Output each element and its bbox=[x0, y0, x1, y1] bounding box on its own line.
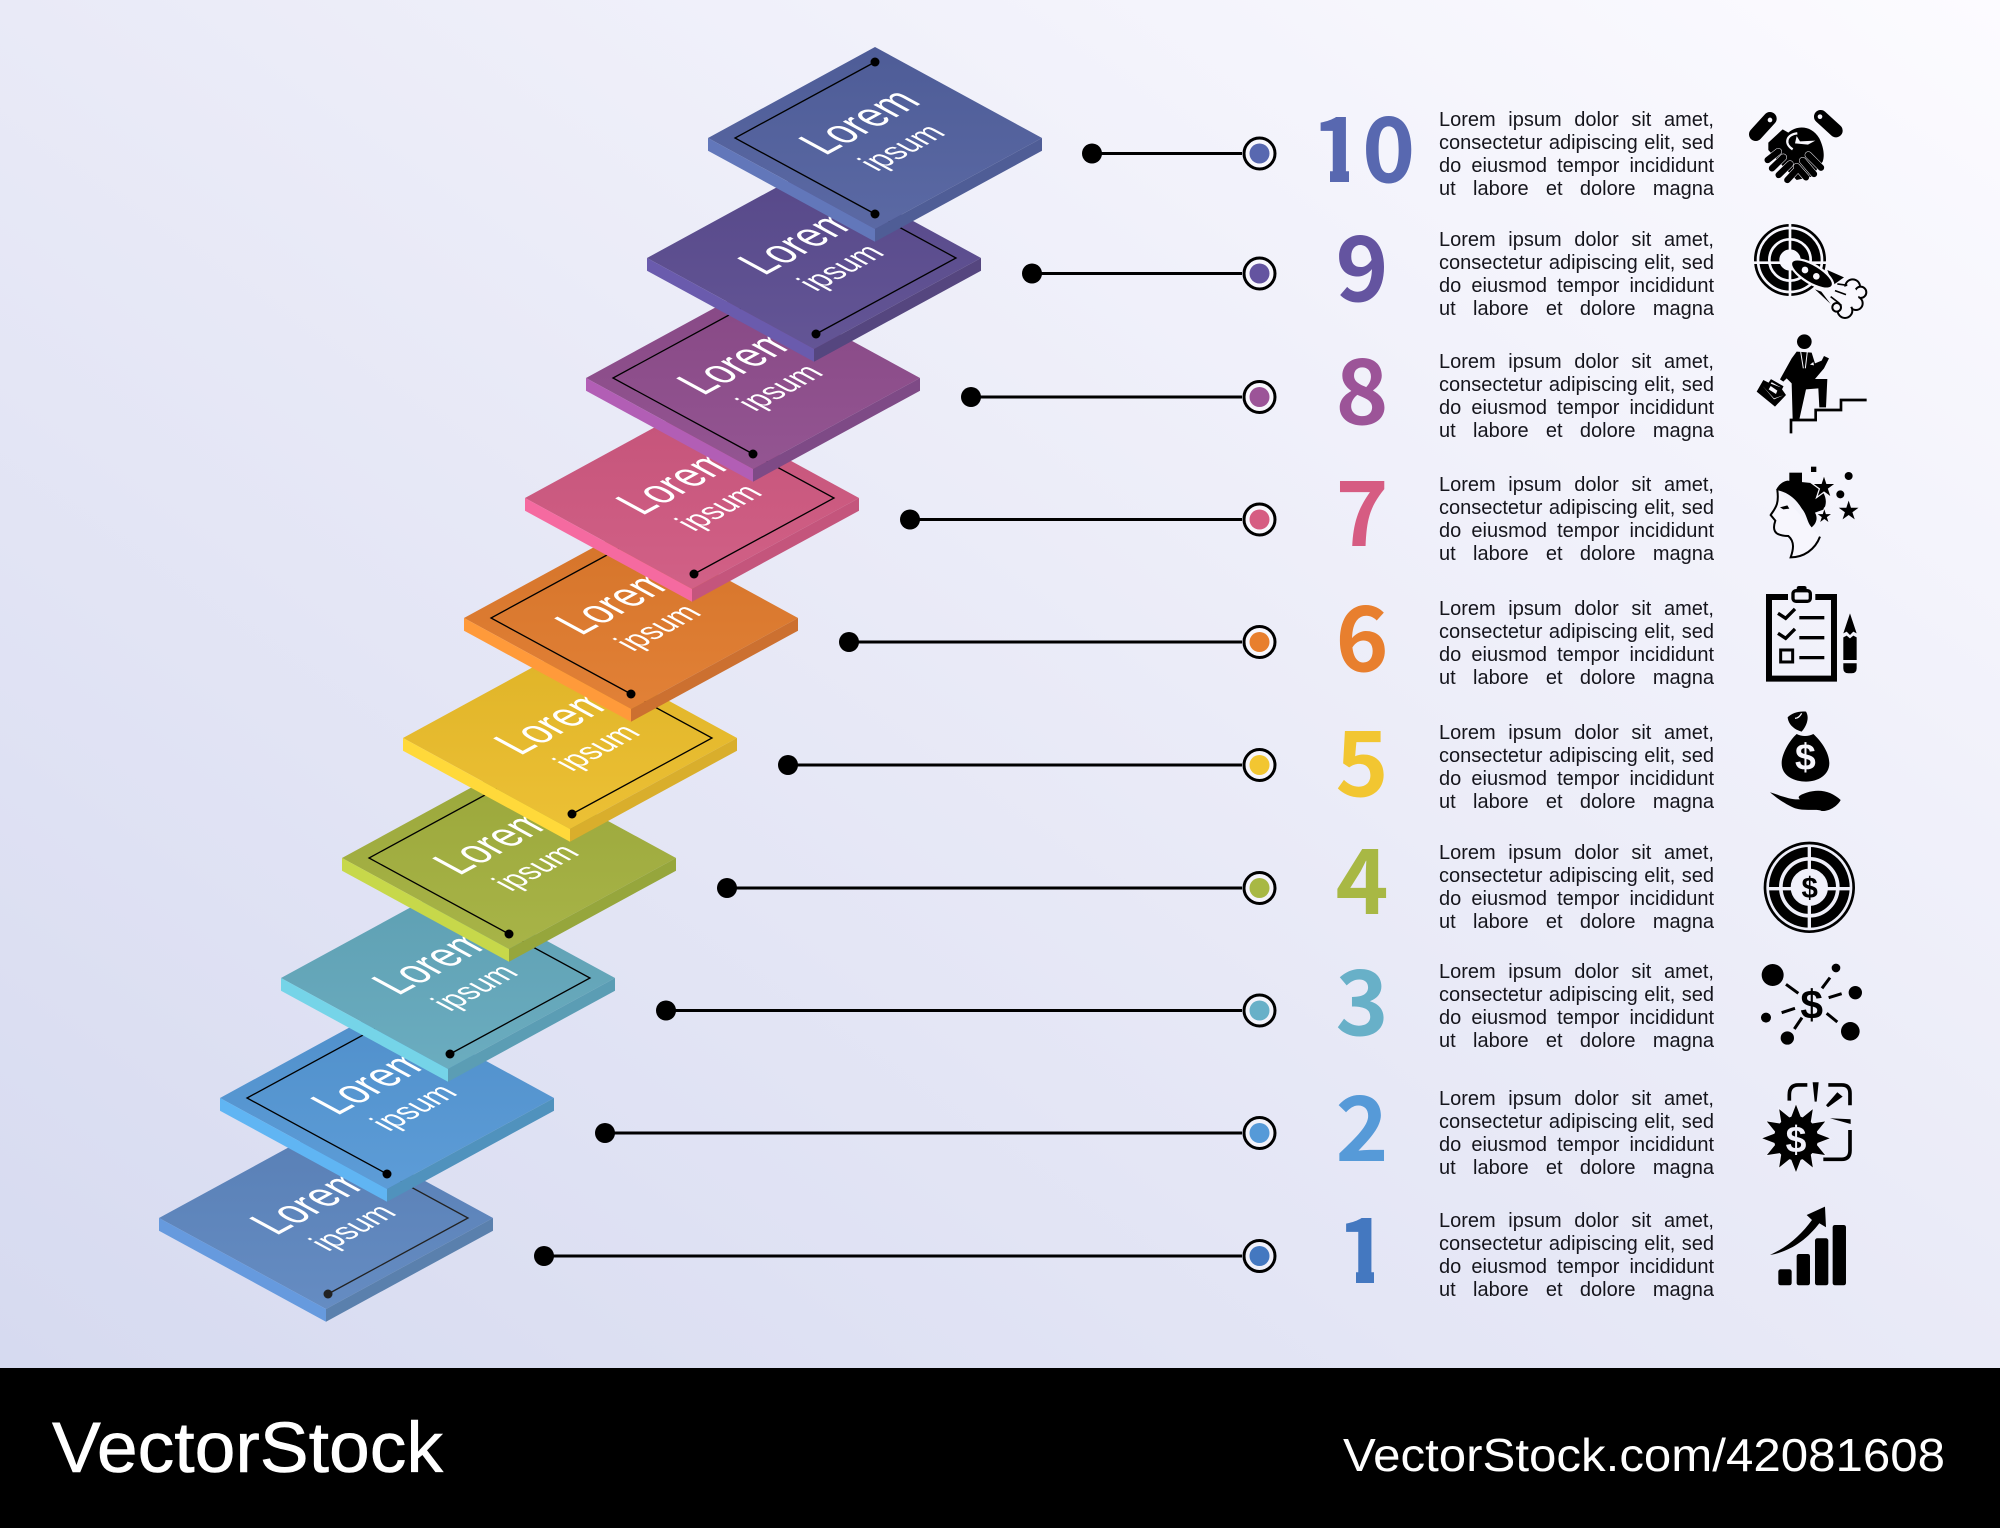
step 10 bbox=[708, 47, 1042, 242]
text block 3 bbox=[1439, 961, 1714, 1052]
step 3: Lorem bbox=[360, 922, 505, 1001]
text block 2: ut labore et dolore magna bbox=[1439, 1157, 1714, 1179]
number 8: 8 bbox=[1335, 320, 1389, 450]
text block 1: do eiusmod tempor incididunt bbox=[1439, 1256, 1714, 1278]
icon: head with stars bbox=[1771, 467, 1858, 557]
step 8: ipsum bbox=[728, 359, 832, 416]
step 8 bbox=[586, 287, 920, 482]
text block 6: do eiusmod tempor incididunt bbox=[1439, 644, 1714, 666]
step 8: Lorem bbox=[665, 322, 810, 401]
text block 6: consectetur adipiscing elit, sed bbox=[1439, 621, 1714, 643]
icon: checklist clipboard and pencil bbox=[1769, 586, 1857, 679]
step 6: ipsum bbox=[606, 599, 710, 656]
text block 10: do eiusmod tempor incididunt bbox=[1439, 155, 1714, 177]
step 2: Lorem bbox=[299, 1042, 444, 1121]
icon: businessman climbing stairs bbox=[1757, 334, 1867, 433]
number 4: 4 bbox=[1335, 810, 1389, 940]
connector 9 bbox=[1022, 258, 1275, 289]
text block 5: ut labore et dolore magna bbox=[1439, 791, 1714, 813]
connector 2 bbox=[595, 1118, 1275, 1148]
text block 7: ut labore et dolore magna bbox=[1439, 543, 1714, 565]
icon: dollar burst with frame: $ bbox=[1786, 1118, 1807, 1160]
icon: growth bar chart with arrow bbox=[1770, 1207, 1846, 1285]
step 4 bbox=[342, 767, 676, 962]
text block 4: do eiusmod tempor incididunt bbox=[1439, 888, 1714, 910]
step 1: Lorem bbox=[238, 1162, 383, 1241]
connector 1 bbox=[534, 1240, 1275, 1272]
icon: handshake bbox=[1756, 114, 1836, 180]
text block 2: Lorem ipsum dolor sit amet, bbox=[1439, 1088, 1714, 1110]
connector 3 bbox=[656, 995, 1275, 1026]
text block 10 bbox=[1439, 109, 1714, 200]
number 6: 6 bbox=[1335, 567, 1389, 697]
step 7: Lorem bbox=[604, 442, 749, 521]
text block 6: ut labore et dolore magna bbox=[1439, 667, 1714, 689]
text block 8: consectetur adipiscing elit, sed bbox=[1439, 374, 1714, 396]
text block 5: do eiusmod tempor incididunt bbox=[1439, 768, 1714, 790]
text block 9 bbox=[1439, 229, 1714, 320]
number 1: 1 bbox=[1336, 1179, 1390, 1309]
step 10: Lorem bbox=[787, 82, 932, 161]
text block 8: do eiusmod tempor incididunt bbox=[1439, 397, 1714, 419]
text block 3: do eiusmod tempor incididunt bbox=[1439, 1007, 1714, 1029]
connector 5 bbox=[778, 750, 1275, 780]
text block 8: Lorem ipsum dolor sit amet, bbox=[1439, 351, 1714, 373]
number 3: 3 bbox=[1335, 931, 1389, 1061]
text block 2 bbox=[1439, 1088, 1714, 1179]
icon: money bag over hand: $ bbox=[1795, 735, 1816, 777]
step 5: Lorem bbox=[482, 682, 627, 761]
image url: VectorStock.com/42081608 bbox=[1343, 1429, 1945, 1481]
text block 4: Lorem ipsum dolor sit amet, bbox=[1439, 842, 1714, 864]
text block 2: do eiusmod tempor incididunt bbox=[1439, 1134, 1714, 1156]
text block 3: Lorem ipsum dolor sit amet, bbox=[1439, 961, 1714, 983]
connector 6 bbox=[839, 626, 1275, 658]
number 5: 5 bbox=[1335, 692, 1389, 822]
text block 1 bbox=[1439, 1210, 1714, 1301]
icon: dollar burst with frame bbox=[1761, 1082, 1851, 1173]
text block 4: consectetur adipiscing elit, sed bbox=[1439, 865, 1714, 887]
step 9: Lorem bbox=[726, 202, 871, 281]
icon: dollar target bbox=[1765, 843, 1854, 932]
text block 5 bbox=[1439, 722, 1714, 813]
text block 8 bbox=[1439, 351, 1714, 442]
step 2: ipsum bbox=[362, 1079, 466, 1136]
text block 7: Lorem ipsum dolor sit amet, bbox=[1439, 474, 1714, 496]
connector 10 bbox=[1082, 138, 1275, 169]
step 1 bbox=[159, 1127, 493, 1322]
text block 9: Lorem ipsum dolor sit amet, bbox=[1439, 229, 1714, 251]
text block 9: consectetur adipiscing elit, sed bbox=[1439, 252, 1714, 274]
icon: dollar network: $ bbox=[1800, 982, 1823, 1028]
text block 9: ut labore et dolore magna bbox=[1439, 298, 1714, 320]
brand name: VectorStock bbox=[52, 1409, 444, 1488]
text block 6 bbox=[1439, 598, 1714, 689]
icon: money bag over hand bbox=[1770, 712, 1841, 811]
text block 8: ut labore et dolore magna bbox=[1439, 420, 1714, 442]
step 5 bbox=[403, 647, 737, 842]
connector 8 bbox=[961, 382, 1275, 412]
text block 7: consectetur adipiscing elit, sed bbox=[1439, 497, 1714, 519]
step 7: ipsum bbox=[667, 479, 771, 536]
step 1: ipsum bbox=[301, 1199, 405, 1256]
text block 5: Lorem ipsum dolor sit amet, bbox=[1439, 722, 1714, 744]
step 9: ipsum bbox=[789, 239, 893, 296]
text block 6: Lorem ipsum dolor sit amet, bbox=[1439, 598, 1714, 620]
step 3 bbox=[281, 887, 615, 1082]
staircase of ten isometric steps bbox=[159, 47, 1042, 1322]
number 9: 9 bbox=[1335, 197, 1389, 327]
number 2: 2 bbox=[1335, 1057, 1389, 1187]
text block 3: consectetur adipiscing elit, sed bbox=[1439, 984, 1714, 1006]
step 2 bbox=[220, 1007, 554, 1202]
step 6: Lorem bbox=[543, 562, 688, 641]
step 4: ipsum bbox=[484, 839, 588, 896]
connector 7 bbox=[900, 504, 1275, 535]
text block 7 bbox=[1439, 474, 1714, 565]
step 4: Lorem bbox=[421, 802, 566, 881]
step 3: ipsum bbox=[423, 959, 527, 1016]
text block 3: ut labore et dolore magna bbox=[1439, 1030, 1714, 1052]
connector 4 bbox=[717, 872, 1275, 904]
icon: dollar target: $ bbox=[1801, 872, 1818, 905]
number 7: 7 bbox=[1335, 442, 1389, 572]
step 6 bbox=[464, 527, 798, 722]
text block 10: Lorem ipsum dolor sit amet, bbox=[1439, 109, 1714, 131]
number 10: 10 bbox=[1311, 78, 1413, 208]
text block 2: consectetur adipiscing elit, sed bbox=[1439, 1111, 1714, 1133]
text block 10: ut labore et dolore magna bbox=[1439, 178, 1714, 200]
step 7 bbox=[525, 407, 859, 602]
text block 10: consectetur adipiscing elit, sed bbox=[1439, 132, 1714, 154]
step 10: ipsum bbox=[850, 119, 954, 176]
icon: target with rocket bbox=[1753, 223, 1866, 318]
text block 5: consectetur adipiscing elit, sed bbox=[1439, 745, 1714, 767]
text block 4: ut labore et dolore magna bbox=[1439, 911, 1714, 933]
step 9 bbox=[647, 167, 981, 362]
text block 7: do eiusmod tempor incididunt bbox=[1439, 520, 1714, 542]
text block 1: consectetur adipiscing elit, sed bbox=[1439, 1233, 1714, 1255]
step 5: ipsum bbox=[545, 719, 649, 776]
text block 1: ut labore et dolore magna bbox=[1439, 1279, 1714, 1301]
text block 9: do eiusmod tempor incididunt bbox=[1439, 275, 1714, 297]
text block 1: Lorem ipsum dolor sit amet, bbox=[1439, 1210, 1714, 1232]
icon: dollar network bbox=[1761, 964, 1862, 1045]
watermark band bbox=[0, 1368, 2000, 1528]
text block 4 bbox=[1439, 842, 1714, 933]
